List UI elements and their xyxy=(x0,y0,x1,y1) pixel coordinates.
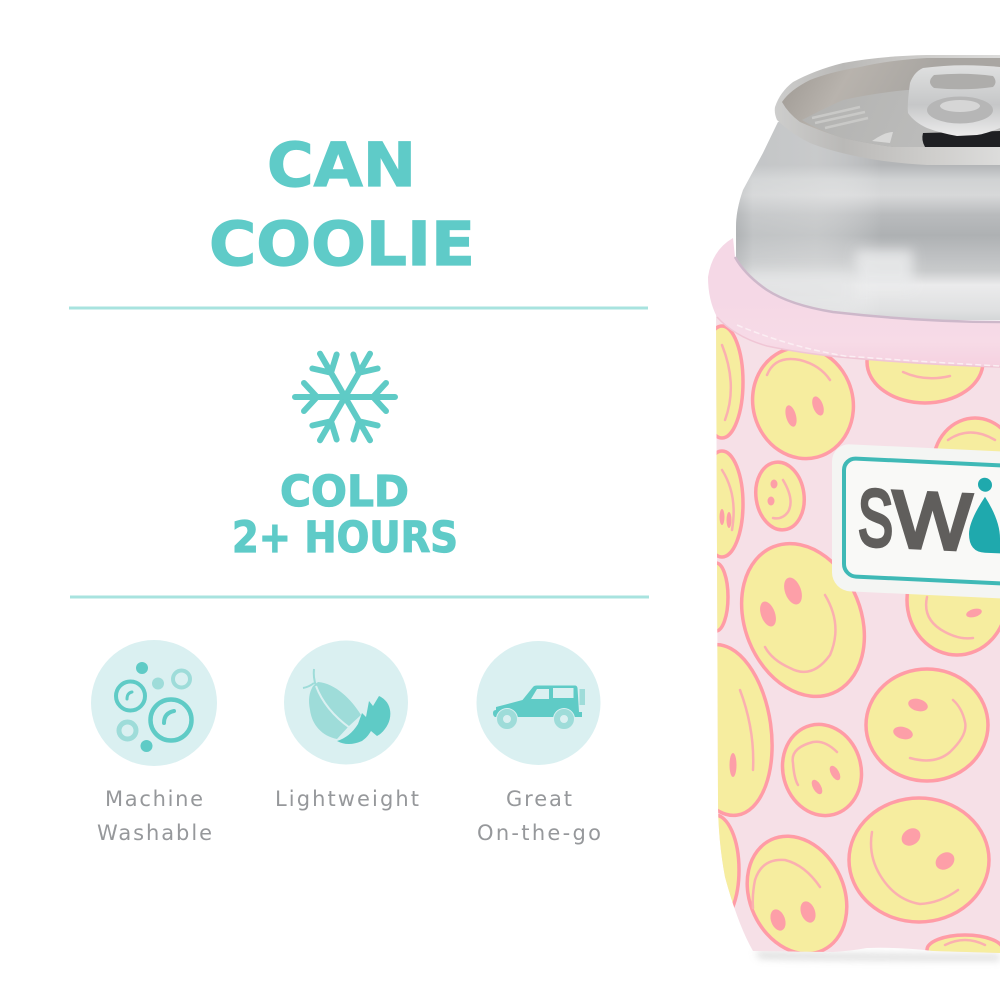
product photo: can in coolie xyxy=(708,55,1000,963)
lid opening xyxy=(922,131,1000,147)
label: great on-the-go: Great xyxy=(506,787,572,811)
coolie body with smiley print xyxy=(716,315,1000,953)
smiley behind label xyxy=(934,416,1000,452)
brand wordmark: W xyxy=(893,474,972,567)
title xyxy=(209,130,475,280)
pull tab xyxy=(908,65,1000,136)
label: lightweight: Lightweight xyxy=(275,787,419,811)
title: COOLIE xyxy=(209,209,475,280)
smiley below label xyxy=(905,594,1000,657)
icon: feather xyxy=(284,640,408,764)
smiley right middle xyxy=(866,669,988,781)
lid print marks xyxy=(812,107,868,128)
coolie shadow xyxy=(755,952,1000,960)
smiley bottom left xyxy=(746,834,848,952)
smiley corner left xyxy=(718,814,741,908)
can lid xyxy=(802,90,1000,147)
smiley large top xyxy=(750,350,856,460)
label: machine washable: Washable xyxy=(97,821,212,845)
divider line bottom xyxy=(70,596,649,598)
icon: bubbles xyxy=(91,640,217,766)
divider line top xyxy=(69,306,648,310)
smiley left large xyxy=(717,642,774,818)
smiley lower middle xyxy=(780,722,864,818)
smiley partial left 2 xyxy=(716,449,745,559)
label: great on-the-go: On-the-go xyxy=(477,821,601,845)
feature: great on-the-go xyxy=(476,641,601,845)
label: machine washable xyxy=(97,787,212,845)
brand wordmark xyxy=(858,472,1000,568)
cold duration heading: COLD xyxy=(280,467,409,517)
icon: snowflake xyxy=(295,347,395,447)
cold duration heading xyxy=(232,467,458,563)
smiley bottom large xyxy=(849,798,989,922)
coolie collar xyxy=(708,238,1000,367)
icon: jeep xyxy=(476,641,600,765)
aluminium can xyxy=(736,55,1000,320)
cold duration heading: 2+ HOURS xyxy=(232,513,458,563)
label: machine washable: Machine xyxy=(105,787,203,811)
can shoulder xyxy=(736,122,1000,320)
feature: machine washable xyxy=(91,640,217,845)
smiley bottom edge xyxy=(925,933,1000,953)
smiley small xyxy=(754,460,806,532)
brand patch xyxy=(832,443,1000,600)
can rim xyxy=(775,55,1000,165)
title: CAN xyxy=(267,130,416,201)
feature: lightweight xyxy=(275,640,419,811)
smiley partial left 3 xyxy=(717,561,730,632)
brand wordmark: S xyxy=(858,473,893,563)
label: great on-the-go xyxy=(477,787,601,845)
can interior wall xyxy=(782,58,1000,147)
smiley partial left 1 xyxy=(716,324,745,440)
smiley large center xyxy=(740,542,866,698)
smiley top right xyxy=(865,360,984,405)
